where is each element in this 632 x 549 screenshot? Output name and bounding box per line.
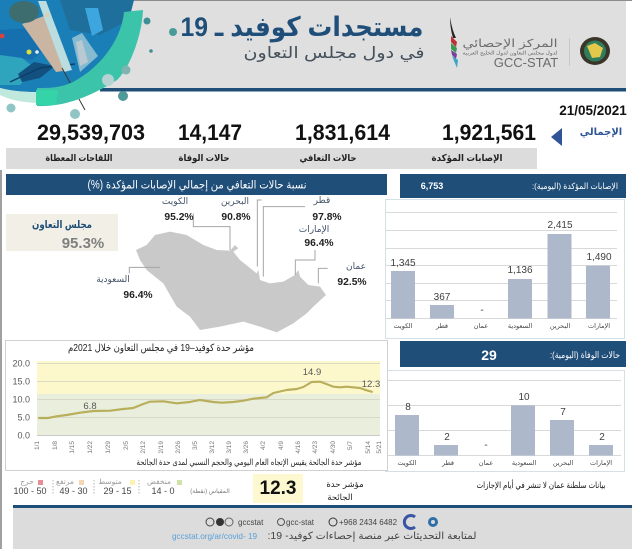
- severity scale legend: مرتفع: [56, 477, 74, 486]
- map label: Bahrain: [221, 196, 251, 223]
- deaths bar chart: عمان: [479, 460, 493, 467]
- line value labels: 14.9: [303, 367, 321, 378]
- map label: Saudi Arabia: السعودية: [96, 274, 130, 284]
- stat: confirmed cases: [432, 120, 536, 164]
- confirmed bar chart: 1,490: [586, 252, 612, 263]
- map label: UAE: [299, 224, 334, 249]
- footer social icons and handles: gcc-stat: [286, 518, 315, 527]
- map label: Kuwait: الكويت: [162, 196, 188, 206]
- stat: confirmed cases: 1,921,561: [442, 120, 536, 145]
- x axis dates: 1/8: [52, 441, 59, 450]
- stats strip: [6, 120, 537, 169]
- stat: deaths: حالات الوفاة: [178, 153, 230, 164]
- GCC total callout: [6, 214, 118, 252]
- confirmed bar chart: الإمارات: [588, 323, 610, 330]
- map of GCC countries: [136, 232, 326, 332]
- map label: Bahrain: البحرين: [221, 196, 249, 206]
- line value labels: 6.8: [83, 401, 97, 412]
- deaths bar chart: 8: [405, 402, 411, 413]
- line value labels: [83, 367, 380, 412]
- confirmed bar chart: [386, 200, 624, 338]
- severity bands: [37, 361, 380, 436]
- deaths bar chart: 7: [560, 407, 566, 418]
- map label: UAE: الإمارات: [299, 224, 329, 235]
- confirmed bar chart: 1,136: [507, 265, 533, 276]
- y axis: 20.0: [12, 358, 30, 368]
- line value labels: 12.3: [362, 379, 380, 390]
- map label: Oman: 92.5%: [337, 277, 367, 288]
- deaths panel heading: 29: [481, 347, 497, 363]
- x axis dates: 2/26: [175, 441, 182, 454]
- total label with arrow: [551, 127, 622, 146]
- map panel heading: [6, 174, 387, 195]
- deaths panel heading: حالات الوفاة (اليومية):: [550, 350, 620, 360]
- severity scale legend: [13, 477, 230, 496]
- map label: Bahrain: 90.8%: [221, 212, 251, 223]
- x axis dates: 4/2: [260, 441, 267, 450]
- deaths bar chart: -: [484, 440, 488, 451]
- x axis dates: 1/15: [69, 441, 76, 454]
- x axis dates: 3/12: [209, 441, 216, 454]
- severity scale legend: 14 - 0: [151, 486, 175, 496]
- x axis dates: 2/19: [158, 441, 165, 454]
- line chart title: مؤشر حدة كوفيد–19 في مجلس التعاون خلال 2021م: [68, 343, 254, 354]
- GCC total callout: 95.3%: [62, 235, 104, 252]
- y axis: [12, 358, 30, 440]
- deaths bar chart: 2: [444, 432, 450, 443]
- x axis dates: 3/26: [243, 441, 250, 454]
- stat: recoveries: حالات التعافي: [300, 153, 356, 164]
- map label: Kuwait: 95.2%: [164, 212, 194, 223]
- stat: recoveries: 1,831,614: [295, 120, 391, 145]
- deaths bar chart: الإمارات: [590, 460, 612, 467]
- deaths bar chart: 2: [599, 432, 605, 443]
- footer social icons and handles: +968 2434 6482: [339, 518, 398, 527]
- x axis dates: 3/5: [192, 441, 199, 450]
- line chart caption: مؤشر حدة الجائحة يقيس الإتجاه العام اليومي والحجم النسبي لمدى حدة الجائحة: [136, 457, 362, 468]
- leader lines: [129, 200, 328, 283]
- confirmed bar chart: الكويت: [394, 323, 413, 330]
- date: 21/05/2021: [559, 103, 627, 118]
- severity scale legend: حرج: [20, 477, 34, 486]
- Oman note: بيانات سلطنة عمان لا تنشر في أيام الإجازات: [476, 479, 606, 491]
- x axis dates: 2/5: [123, 441, 130, 450]
- x axis dates: 4/16: [295, 441, 302, 454]
- stat: confirmed cases: الإصابات المؤكدة: [432, 153, 502, 164]
- logo: GCC-STAT: GCC-STAT: [494, 55, 558, 70]
- x axis dates: [34, 441, 383, 454]
- subtitle: في دول مجلس التعاون: [244, 45, 424, 63]
- map panel heading: نسبة حالات التعافي من إجمالي الإصابات المؤكدة (%): [88, 180, 306, 192]
- x axis dates: 1/1: [34, 441, 41, 450]
- deaths bar chart: [386, 370, 624, 472]
- x axis dates: 4/23: [312, 441, 319, 454]
- confirmed bar chart: عمان: [474, 323, 488, 330]
- GCC total callout: مجلس التعاون: [32, 219, 92, 231]
- severity scale legend: 29 - 15: [103, 486, 132, 496]
- deaths bar chart: الكويت: [398, 460, 417, 467]
- map label: UAE: 96.4%: [304, 238, 334, 249]
- current severity index: مؤشر حدة: [326, 479, 364, 489]
- x axis dates: 4/9: [278, 441, 285, 450]
- map label: Qatar: 97.8%: [312, 212, 342, 223]
- map label: Qatar: قطر: [313, 195, 330, 205]
- panel: daily deaths: [386, 341, 626, 472]
- x axis dates: 1/22: [87, 441, 94, 454]
- title: مستجدات كوفيد ـ 19: [180, 12, 424, 43]
- confirmed panel heading: 6,753: [421, 181, 443, 191]
- deaths bar chart: قطر: [441, 460, 454, 467]
- y axis: 0.0: [17, 430, 30, 440]
- map label: Oman: [337, 261, 367, 288]
- deaths panel heading: [400, 341, 626, 367]
- total label with arrow: الإجمالي: [580, 127, 622, 138]
- logo: GCC-STAT: [450, 17, 570, 70]
- stat: vaccinations: اللقاحات المعطاة: [46, 153, 112, 164]
- map label: Oman: عمان: [346, 261, 366, 271]
- deaths bar chart: السعودية: [512, 460, 536, 467]
- x axis dates: 2/12: [140, 441, 147, 454]
- confirmed bar chart: 2,415: [547, 220, 573, 231]
- syringe needle: [62, 68, 85, 110]
- confirmed bar chart: البحرين: [550, 323, 570, 330]
- footer social icons and handles: [206, 516, 438, 528]
- map label: Kuwait: [162, 196, 194, 223]
- footer link line: لمتابعة التحديثات عبر منصة إحصاءات كوفيد- 19:: [268, 531, 476, 542]
- footer link line: gccstat.org/ar/covid- 19: [172, 532, 258, 541]
- header artwork: medical circle with syringe: [0, 0, 177, 119]
- current severity index: 12.3: [260, 478, 296, 499]
- severity scale legend: 100 - 50: [13, 486, 47, 496]
- logo: GCC emblem: [580, 37, 610, 65]
- deaths bar chart: البحرين: [553, 460, 573, 467]
- x axis dates: 5/7: [347, 441, 354, 450]
- deaths bar chart: 10: [518, 392, 530, 403]
- map label: Qatar: [312, 195, 342, 223]
- current severity index: الجائحة: [327, 492, 353, 502]
- stat: vaccinations: 29,539,703: [37, 120, 145, 145]
- y axis: 15.0: [12, 376, 30, 386]
- stat: vaccinations: [37, 120, 145, 164]
- severity scale legend: 49 - 30: [59, 486, 88, 496]
- stat: deaths: 14,147: [178, 120, 242, 145]
- confirmed panel heading: الإصابات المؤكدة (اليومية):: [532, 181, 618, 192]
- confirmed bar chart: -: [480, 305, 484, 316]
- y axis: 10.0: [12, 394, 30, 404]
- severity line: [38, 382, 373, 418]
- x axis dates: 1/29: [105, 441, 112, 454]
- x axis dates: 5/21: [376, 441, 383, 454]
- stat: recoveries: [295, 120, 391, 164]
- confirmed bar chart: 1,345: [390, 258, 416, 269]
- logo: GCC-STAT: لدول مجلس التعاون لدول الخليج العربية: [462, 50, 558, 56]
- teal ring: [37, 10, 143, 106]
- x axis dates: 5/14: [365, 441, 372, 454]
- confirmed bar chart: السعودية: [508, 323, 532, 330]
- header banner: [0, 0, 632, 92]
- severity scale legend: منخفض: [147, 477, 171, 486]
- stat: deaths: [178, 120, 242, 164]
- panel: severity index line chart: [6, 340, 388, 470]
- x axis dates: 4/30: [330, 441, 337, 454]
- confirmed bar chart: قطر: [435, 323, 448, 330]
- panel: daily confirmed cases: [386, 174, 626, 338]
- map label: Saudi Arabia: 96.4%: [123, 290, 153, 301]
- current severity index: [253, 474, 364, 503]
- y axis: 5.0: [17, 412, 30, 422]
- x axis dates: 3/19: [226, 441, 233, 454]
- footer: [13, 505, 632, 549]
- severity scale legend: متوسط: [98, 477, 122, 486]
- map label: Saudi Arabia: [96, 274, 153, 301]
- footer social icons and handles: gccstat: [238, 518, 264, 527]
- confirmed panel heading: [400, 174, 626, 198]
- footer link line: [172, 531, 476, 542]
- panel: recovery rate map: [6, 174, 387, 332]
- confirmed bar chart: 367: [434, 292, 451, 303]
- severity scale legend: المقياس (نقطة): [190, 488, 230, 495]
- logo: GCC-STAT: المركز الإحصائي: [462, 38, 558, 50]
